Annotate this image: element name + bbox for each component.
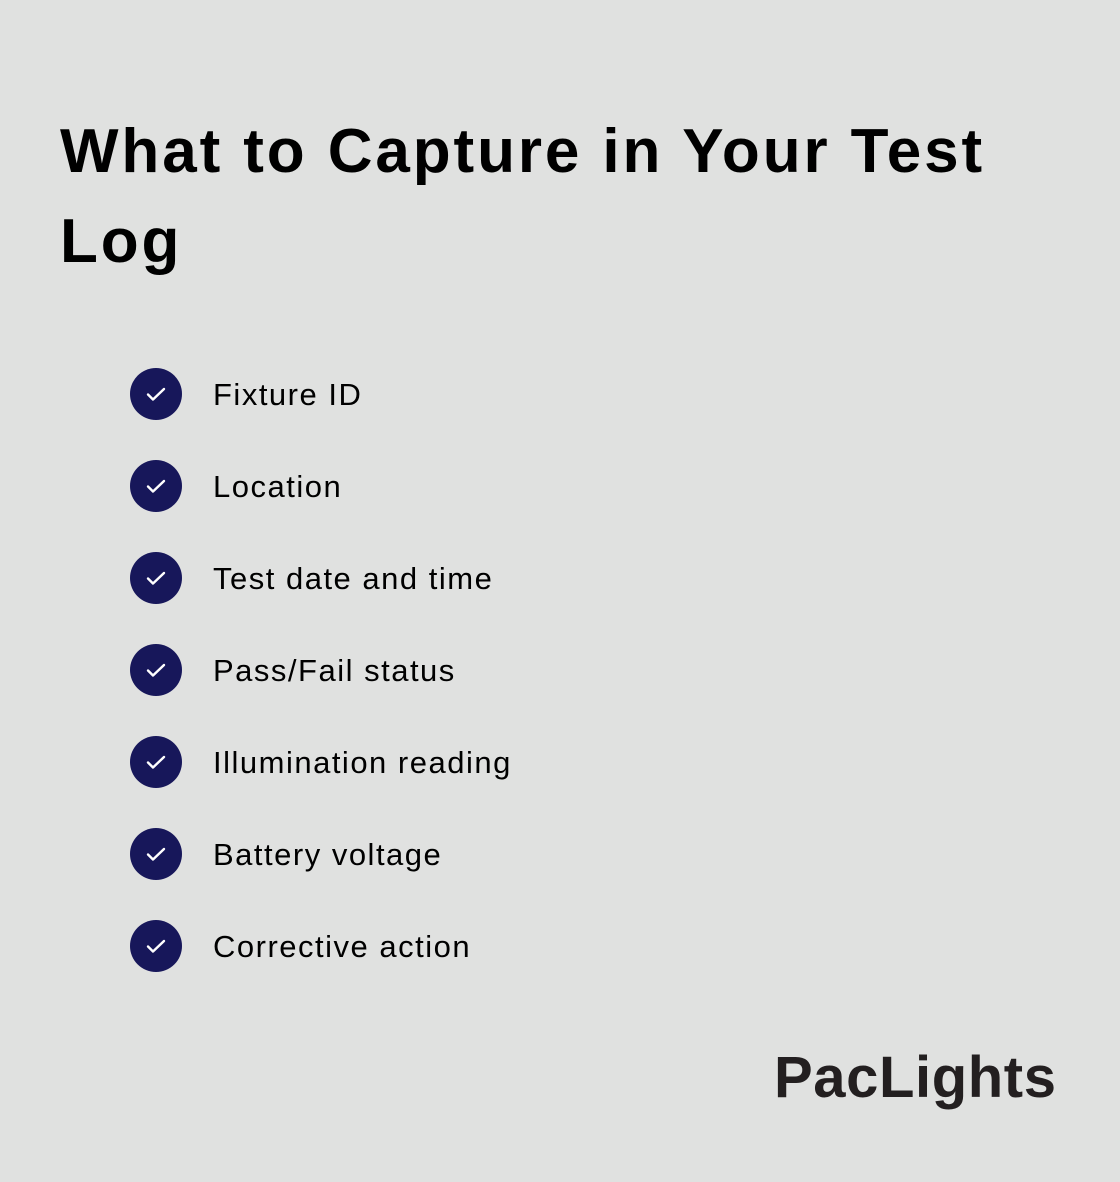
item: illumination: Illumination reading [213, 745, 512, 780]
logo: PacLights [774, 1045, 1057, 1110]
item: test date: Test date and time [213, 561, 493, 596]
item: corrective action [130, 920, 471, 972]
title: What to Capture in Your Test Log [60, 117, 985, 276]
item: location: Location [213, 469, 342, 504]
item: battery [130, 828, 442, 880]
item: corrective action: Corrective action [213, 929, 471, 964]
item: location [130, 460, 342, 512]
item: test date [130, 552, 493, 604]
item: battery: Battery voltage [213, 837, 442, 872]
checklist [130, 368, 512, 972]
item: pass/fail: Pass/Fail status [213, 653, 456, 688]
item: pass/fail [130, 644, 456, 696]
item: illumination [130, 736, 512, 788]
item: fixture id [130, 368, 362, 420]
item: fixture id: Fixture ID [213, 377, 362, 412]
